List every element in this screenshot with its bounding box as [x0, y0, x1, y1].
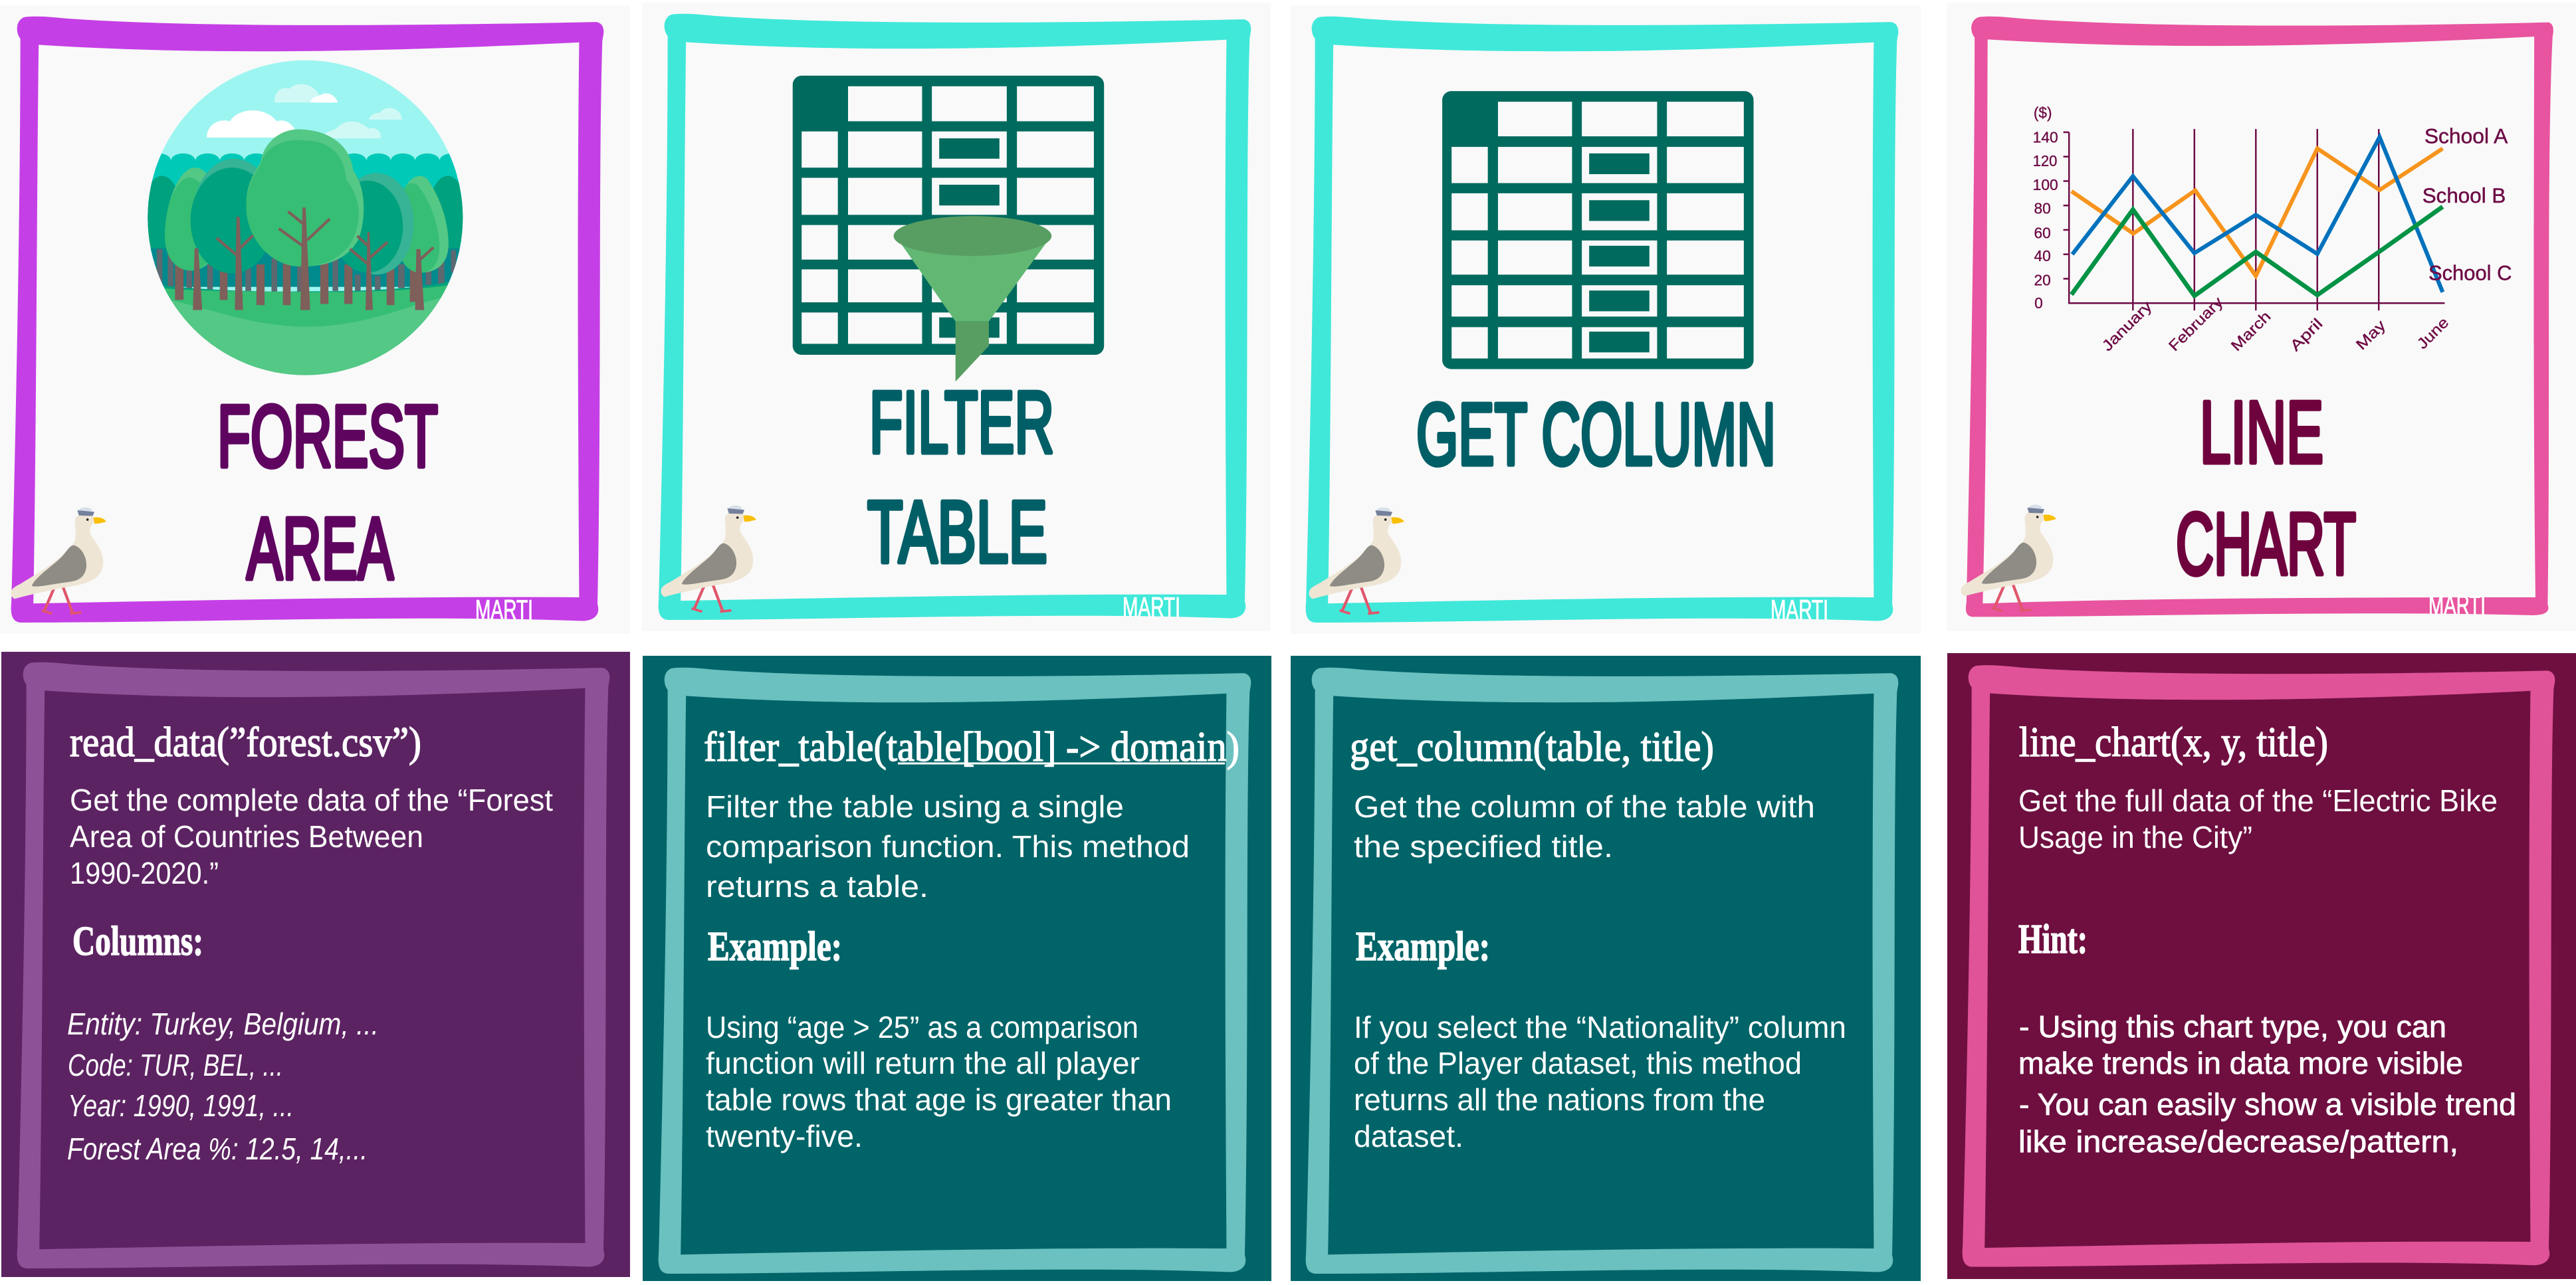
- example text: dataset.: [1354, 1119, 1463, 1153]
- function name: read_data(”forest.csv”): [70, 718, 421, 765]
- x axis labels: March: [2227, 308, 2274, 354]
- column list: Entity: Turkey, Belgium, ...: [67, 1007, 379, 1041]
- panel: line chart cover: [1947, 3, 2576, 631]
- hint text: - Using this chart type, you can: [2019, 1009, 2446, 1044]
- card frame: [1306, 17, 1898, 623]
- title: forest area: AREA: [247, 500, 393, 597]
- y axis labels: 120: [2033, 152, 2057, 169]
- example text: Using “age > 25” as a comparison: [706, 1010, 1138, 1044]
- series: school B: [2072, 137, 2442, 292]
- example text: function will return the all player: [706, 1046, 1140, 1080]
- card frame: [659, 668, 1251, 1274]
- example text: [706, 1010, 1172, 1153]
- description: the specified title.: [1354, 829, 1613, 864]
- example text: returns all the nations from the: [1354, 1082, 1765, 1117]
- heading: example: Example:: [1356, 924, 1490, 969]
- hint text: - You can easily show a visible trend: [2019, 1087, 2516, 1122]
- card frame: [1306, 668, 1898, 1274]
- title: get column: GET COLUMN: [1416, 385, 1776, 483]
- card frame: [17, 662, 609, 1268]
- x axis labels: [2098, 293, 2452, 354]
- panel: filter_table description: [643, 656, 1271, 1281]
- y axis labels: 20: [2034, 271, 2051, 288]
- icon: table with funnel: [793, 76, 1104, 381]
- panel: line_chart description: [1947, 653, 2576, 1279]
- card frame: [11, 17, 603, 623]
- y axis labels: 80: [2034, 200, 2051, 217]
- description: Get the column of the table with: [1354, 789, 1815, 824]
- y axis labels: 100: [2033, 176, 2058, 193]
- description: 1990-2020.”: [70, 856, 219, 890]
- icon: seagull: [661, 506, 756, 611]
- icon: table with highlighted column: [1442, 91, 1754, 369]
- y axis labels: [2033, 104, 2058, 312]
- function name: line_chart(x, y, title): [2019, 718, 2328, 765]
- title: line chart: LINE: [2200, 383, 2323, 481]
- hint text: [2018, 1009, 2516, 1159]
- column list: Code: TUR, BEL, ...: [68, 1048, 283, 1082]
- icon: forest in a circle: [142, 60, 468, 387]
- example text: twenty-five.: [706, 1119, 863, 1153]
- function name: filter_table(table[bool] -> domain): [704, 723, 1239, 770]
- y axis labels: 60: [2034, 224, 2051, 241]
- heading: hint: Hint:: [2018, 917, 2088, 962]
- description: Area of Countries Between: [70, 819, 423, 854]
- title: line chart: [2176, 383, 2356, 593]
- description: [706, 789, 1190, 904]
- example text: of the Player dataset, this method: [1354, 1046, 1802, 1080]
- signature: MARTI: [1771, 594, 1828, 625]
- hint text: like increase/decrease/pattern,: [2018, 1124, 2458, 1159]
- signature: MARTI: [1123, 591, 1180, 623]
- example text: [1354, 1010, 1846, 1153]
- icon: seagull: [1961, 505, 2056, 611]
- panel: get column cover: [1291, 5, 1921, 634]
- panel: get_column description: [1291, 656, 1921, 1281]
- column list: Year: 1990, 1991, ...: [68, 1088, 294, 1123]
- series labels: School B: [2422, 183, 2506, 207]
- description: [2018, 783, 2498, 854]
- y axis labels: 0: [2034, 294, 2043, 312]
- icon: seagull: [1309, 508, 1404, 613]
- title: forest area: FOREST: [217, 387, 438, 485]
- description: comparison function. This method: [706, 829, 1190, 864]
- card frame: [1966, 17, 2553, 617]
- panel: filter table cover: [642, 3, 1271, 631]
- title: line chart: CHART: [2176, 495, 2356, 593]
- column list: Forest Area %: 12.5, 14,...: [67, 1132, 368, 1166]
- chart axes: [2064, 129, 2444, 310]
- hint text: make trends in data more visible: [2018, 1046, 2463, 1080]
- title: filter table: TABLE: [867, 483, 1047, 581]
- y axis labels: 40: [2034, 247, 2051, 264]
- column list: [67, 1007, 379, 1166]
- title: filter table: FILTER: [869, 373, 1054, 471]
- x axis labels: January: [2098, 297, 2155, 354]
- series labels: School A: [2424, 124, 2508, 148]
- series labels: School C: [2428, 260, 2512, 284]
- description: Get the complete data of the “Forest: [70, 783, 553, 817]
- line chart: [2033, 104, 2512, 354]
- description: [70, 783, 553, 890]
- icon: seagull: [11, 508, 106, 613]
- series: school A: [2072, 149, 2442, 276]
- description: [1354, 789, 1815, 864]
- series: school C: [2072, 207, 2442, 296]
- y axis labels: 140: [2033, 128, 2058, 146]
- card frame: [1963, 665, 2555, 1267]
- description: Get the full data of the “Electric Bike: [2018, 783, 2498, 818]
- title: forest area: [217, 387, 438, 597]
- description: Usage in the City”: [2018, 820, 2252, 854]
- panel: read_data description: [1, 652, 630, 1277]
- card frame: [659, 14, 1251, 620]
- function name: get_column(table, title): [1350, 723, 1714, 770]
- panel: forest area cover: [0, 5, 630, 634]
- x axis labels: June: [2413, 314, 2452, 352]
- y axis labels: ($): [2034, 104, 2052, 122]
- title: filter table: [867, 373, 1054, 581]
- heading: example: Example:: [708, 924, 842, 969]
- signature: MARTI: [475, 594, 533, 625]
- series labels: [2422, 124, 2512, 284]
- signature: MARTI: [2428, 589, 2486, 621]
- description: returns a table.: [706, 869, 928, 904]
- heading: columns: Columns:: [72, 919, 203, 964]
- example text: table rows that age is greater than: [706, 1082, 1172, 1117]
- example text: If you select the “Nationality” column: [1354, 1010, 1846, 1044]
- x axis labels: May: [2352, 316, 2389, 353]
- description: Filter the table using a single: [706, 789, 1124, 824]
- x axis labels: February: [2165, 293, 2226, 354]
- x axis labels: April: [2286, 315, 2326, 354]
